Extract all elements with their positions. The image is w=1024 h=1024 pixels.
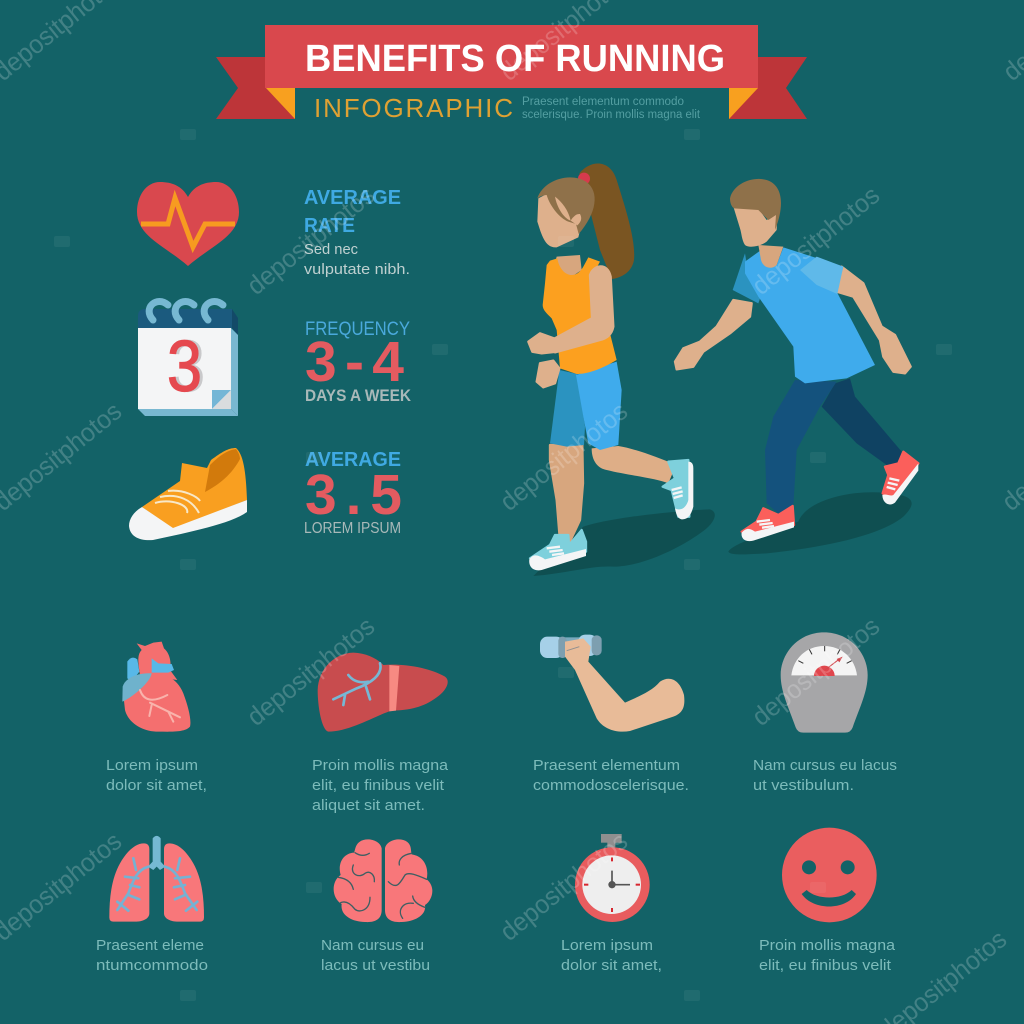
- ribbon main band: [265, 25, 758, 88]
- stat: frequency: [305, 319, 411, 405]
- icon: liver: [318, 653, 448, 732]
- caption: heart: Lorem ipsum: [106, 757, 198, 774]
- icon: calendar: [138, 301, 238, 416]
- caption: smiley: elit, eu finibus velit: [759, 957, 892, 974]
- caption: brain: lacus ut vestibu: [321, 957, 430, 974]
- stat: average rate: RATE: [304, 215, 355, 237]
- title: BENEFITS OF RUNNING: [305, 38, 725, 80]
- watermarks: depositphotos: [494, 826, 633, 947]
- caption: smiley: Proin mollis magna: [759, 937, 896, 954]
- figure: man runner: [675, 179, 918, 541]
- icon: calendar: 3: [170, 327, 205, 407]
- caption: stopwatch: dolor sit amet,: [561, 957, 662, 974]
- illustration: runners: [528, 163, 918, 576]
- stat: average distance: 3.5: [305, 463, 402, 527]
- watermarks: depositphotos: [746, 180, 885, 301]
- icon: arm with dumbbell: [540, 635, 684, 732]
- caption: stopwatch: Lorem ipsum: [561, 937, 653, 954]
- watermarks: depositphotos: [494, 396, 633, 517]
- watermarks: depositphotos: [241, 611, 380, 732]
- caption: arm: commodoscelerisque.: [533, 777, 689, 794]
- icon: lungs: [109, 836, 204, 922]
- caption: liver: aliquet sit amet.: [312, 797, 425, 814]
- icon: brain: [334, 839, 432, 922]
- stat: frequency: DAYS A WEEK: [305, 387, 411, 405]
- ribbon fold left: [266, 88, 295, 119]
- stat: average distance: LOREM IPSUM: [304, 520, 401, 537]
- subtitle: INFOGRAPHIC: [314, 93, 513, 123]
- stat: average rate: [304, 187, 410, 278]
- icon: stopwatch: [575, 834, 650, 922]
- caption: liver: elit, eu finibus velit: [312, 777, 445, 794]
- caption: lungs: Praesent eleme: [96, 937, 204, 954]
- caption: liver: Proin mollis magna: [312, 757, 449, 774]
- item: heart organ: [122, 642, 448, 732]
- icon: weight scale: [781, 632, 868, 733]
- header banner: [216, 25, 807, 123]
- caption: scale: ut vestibulum.: [753, 777, 854, 794]
- woman shadow: [533, 509, 715, 576]
- stat: average distance: AVERAGE: [305, 449, 401, 471]
- watermarks: depositphotos: [241, 180, 380, 301]
- watermarks: depositphotos: [746, 611, 885, 732]
- man shadow: [728, 492, 912, 554]
- ribbon tail left: [216, 57, 295, 119]
- figure: woman runner: [528, 163, 693, 570]
- caption: heart: dolor sit amet,: [106, 777, 207, 794]
- icon: orange sneaker: [129, 448, 247, 540]
- ribbon tail right: [729, 57, 807, 119]
- icon: calendar: 3: [167, 327, 202, 407]
- stat: average rate: Sed nec: [304, 242, 358, 258]
- caption: scale: Nam cursus eu lacus: [753, 757, 897, 774]
- header note: Praesent elementum commodo: [522, 96, 684, 108]
- caption: lungs: ntumcommodo: [96, 957, 208, 974]
- icon: heart with pulse: [137, 182, 239, 266]
- stat: average rate: vulputate nibh.: [304, 262, 410, 278]
- caption: brain: Nam cursus eu: [321, 937, 424, 954]
- caption: arm: Praesent elementum: [533, 757, 680, 774]
- stat: average rate: AVERAGE: [304, 187, 401, 209]
- stat: frequency: 3-4: [305, 330, 404, 394]
- ribbon fold right: [729, 88, 758, 119]
- icon: anatomical heart: [122, 642, 190, 732]
- stat: frequency: FREQUENCY: [305, 319, 410, 340]
- icon: smiley face: [782, 828, 877, 922]
- header note: scelerisque. Proin mollis magna elit: [522, 109, 701, 121]
